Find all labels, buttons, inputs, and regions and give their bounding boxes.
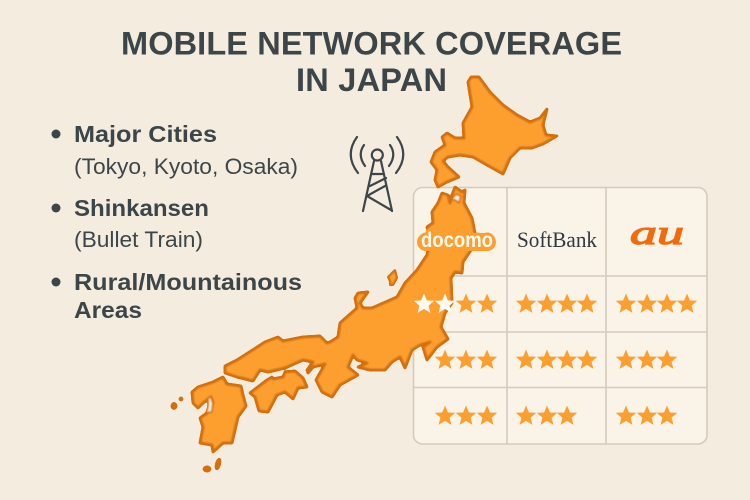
Shikoku [250,371,307,412]
logo: SoftBank: SoftBank [517,227,597,252]
small islands [171,397,222,472]
star ratings [414,294,697,425]
au row 1 stars [616,294,697,313]
SoftBank row 2 stars [516,350,597,369]
bullet: major cities: Major Cities [74,121,217,147]
Sado island [388,270,397,285]
au row 3 stars [616,406,677,425]
map of Japan [171,77,557,472]
Mutsu Bay [451,194,461,203]
logo: docomo: docomo [421,229,493,252]
bullet: rural areas: Rural/Mountainous [74,269,302,295]
bullet list: coverage areas [52,121,302,323]
docomo row 3 stars [435,406,497,425]
title: MOBILE NETWORK COVERAGE [121,26,622,62]
bullet: major cities: (Tokyo, Kyoto, Osaka) [74,154,298,179]
title: IN JAPAN [296,62,447,98]
logo: au: au [630,215,684,252]
comparison table [414,188,707,444]
Kyushu [192,377,246,452]
docomo row 2 stars [435,350,497,369]
bullet: shinkansen [52,195,209,252]
Hokkaido [431,77,557,187]
bullet: rural areas [52,269,302,323]
bullet: shinkansen: Shinkansen [74,195,209,221]
Ariake Sea [206,397,213,413]
au row 2 stars [616,350,677,369]
bullet: rural areas: Areas [74,297,142,323]
Honshu [225,187,475,397]
bullet: major cities [52,121,298,179]
icon: signal tower [351,137,403,211]
bullet: shinkansen: (Bullet Train) [74,227,203,252]
docomo row 1 stars [414,294,497,313]
SoftBank row 1 stars [516,294,597,313]
SoftBank row 3 stars [516,406,577,425]
title [121,26,622,98]
